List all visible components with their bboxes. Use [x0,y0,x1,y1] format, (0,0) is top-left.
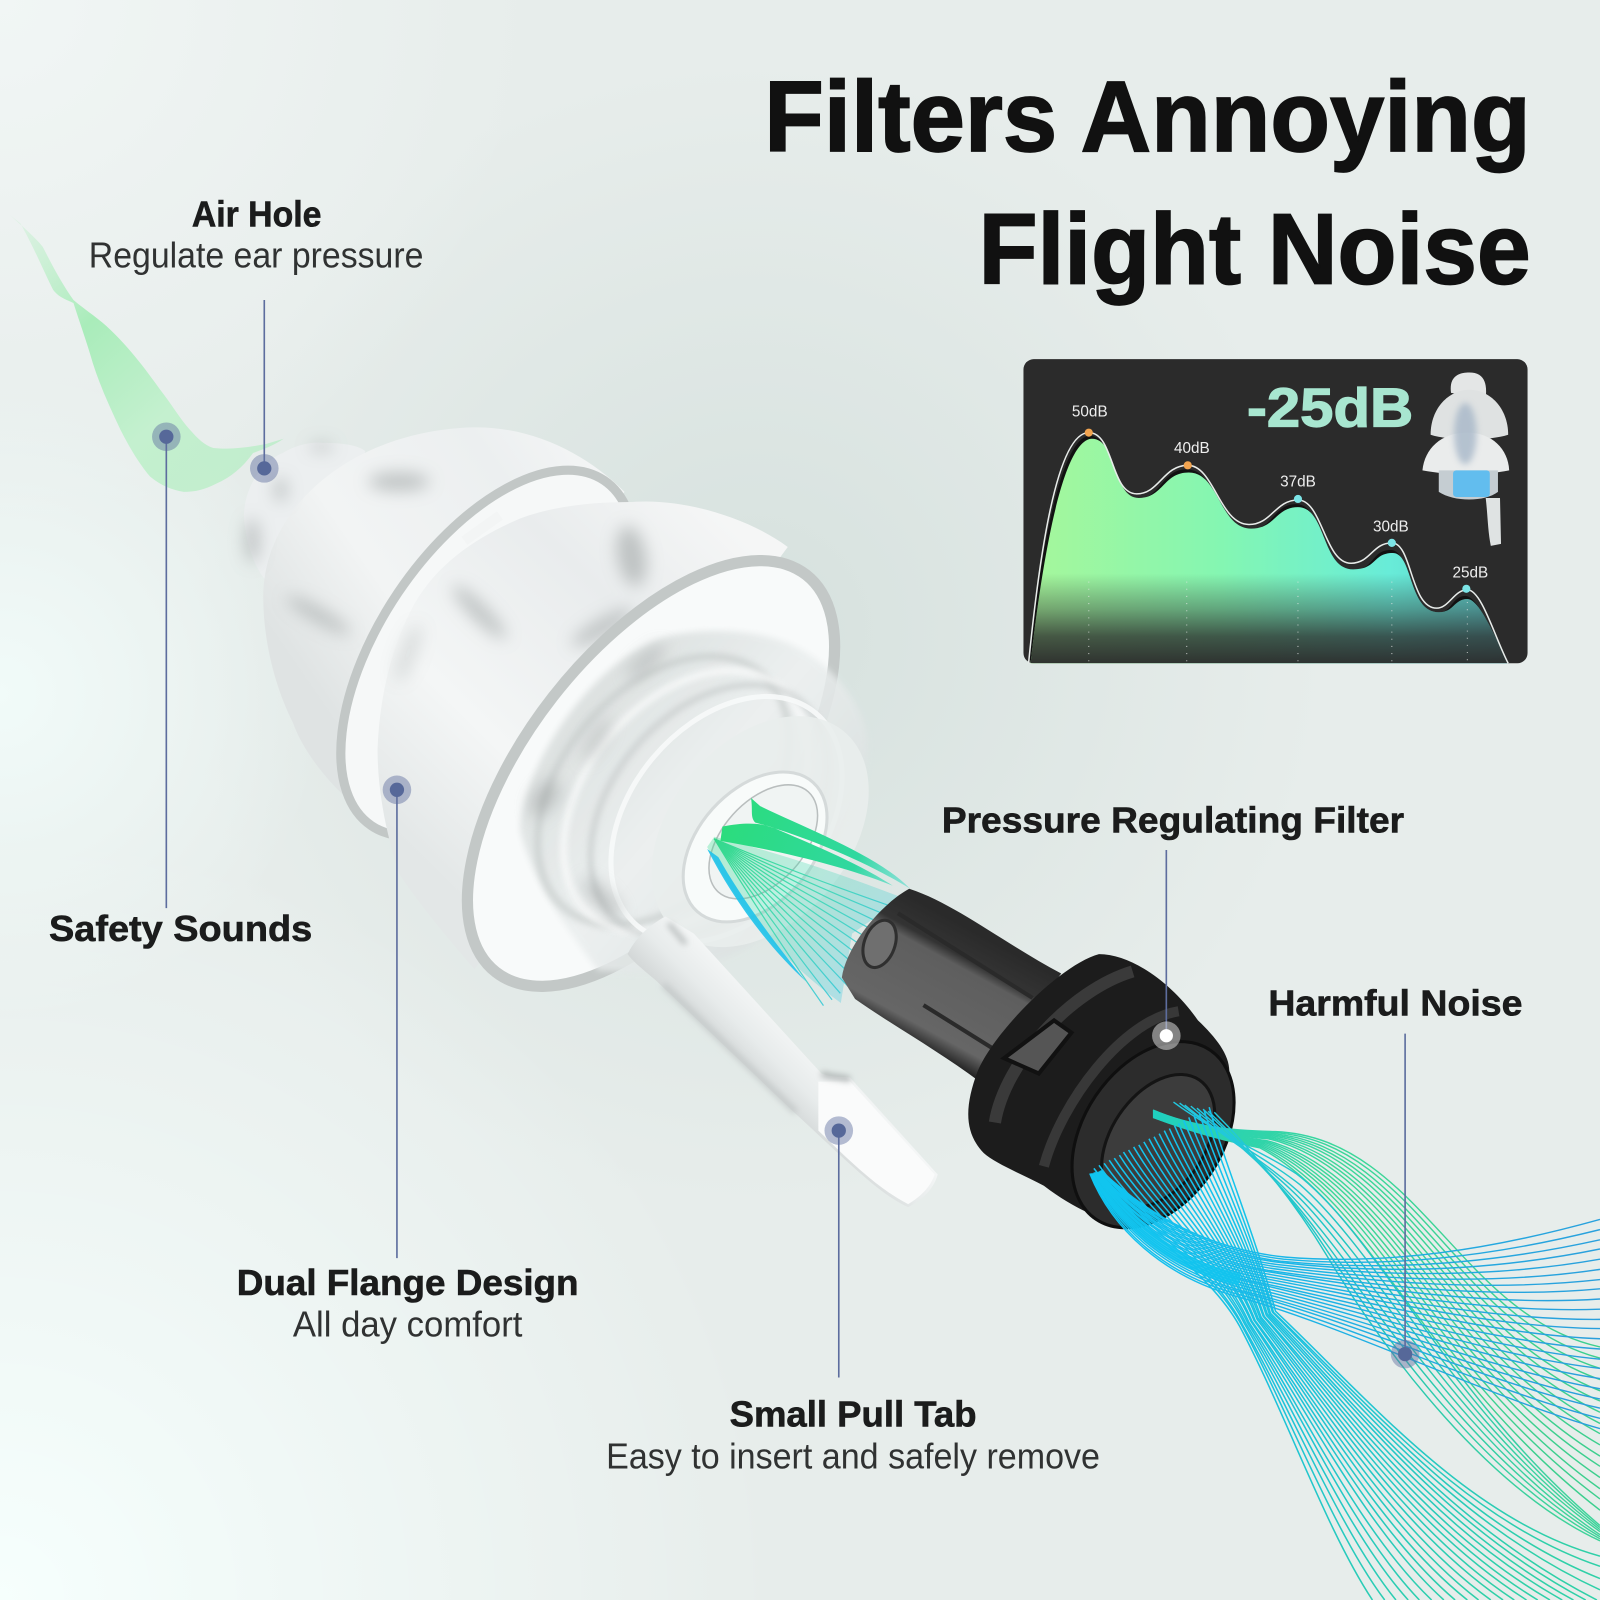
teal diagonal wave family [1173,1102,1600,1541]
label: small pull tab: Easy to insert and safely remove [606,1436,1100,1476]
pressure regulating filter, black [842,889,1268,1258]
callout: air hole marker [250,300,279,483]
lower cyan edge [707,849,806,982]
chart panel: -25dB [1023,359,1528,663]
callout: safety sounds marker [152,422,181,908]
filter front face [1038,1011,1268,1258]
inner hole shadow ring [688,764,839,919]
label: small pull tab: Small Pull Tab [730,1395,977,1435]
label: small pull tab [606,1395,1100,1476]
fan fill [707,837,903,1003]
earplug tip knob [244,443,365,588]
title [764,61,1531,306]
front flange ring [398,498,904,1049]
filter stem notch [857,916,902,972]
filter collar highlight band [995,971,1133,1122]
panel background [1023,359,1528,663]
pull tab edge highlight [663,923,850,1112]
label: harmful noise: Harmful Noise [1268,983,1522,1023]
inner sound wave [675,798,910,1006]
pull tab head [818,1082,935,1204]
cyan band core [1097,1172,1240,1280]
filter collar body [968,954,1229,1221]
label: safety sounds: Safety Sounds [49,909,312,949]
white curve line [1029,433,1508,663]
neck thread rings [487,608,889,987]
back flange bell [263,427,624,829]
filter mid band [1044,1011,1179,1166]
peak labels: 37dB [1280,474,1316,491]
peak labels [1072,403,1488,582]
front flange shading [390,523,651,685]
-25dB value: -25dB [1247,377,1413,439]
label: dual flange design [237,1263,579,1345]
label: air hole: Regulate ear pressure [89,235,423,275]
chart bottom fade [1026,573,1515,663]
callout: harmful noise marker [1391,1034,1419,1368]
label: dual flange design: All day comfort [293,1305,523,1345]
peak markers [1085,429,1470,593]
top green band [720,798,910,889]
callout: pressure filter marker [1152,850,1181,1050]
teal wave family [1094,1107,1600,1600]
title: Flight Noise [979,194,1531,306]
peak labels: 30dB [1373,519,1409,536]
peak labels: 50dB [1072,403,1108,420]
harmful noise waves [1090,1102,1600,1600]
peak labels: 40dB [1174,440,1210,457]
callout: pull tab marker [824,1116,853,1378]
chart area [1031,439,1508,663]
pull tab [628,916,938,1207]
filter stem [842,889,1061,1082]
callout lines and markers [152,300,1419,1378]
air sound wave, green [10,215,284,492]
front flange bell [378,501,788,969]
callout: dual flange marker [383,776,411,1258]
label: dual flange design: Dual Flange Design [237,1263,579,1303]
filter collar slot [1004,1020,1071,1073]
label: air hole: Air Hole [192,195,321,235]
label: air hole [89,195,423,275]
neck end face [607,674,913,989]
title: Filters Annoying [764,61,1531,173]
curve shadow [1029,436,1506,660]
back flange shading [245,443,430,640]
threaded neck [520,631,867,972]
neck shading [525,641,669,922]
ring highlight break [464,515,500,541]
filter inner opening [1078,1054,1238,1228]
chart dotted guide lines [1089,582,1467,663]
label: pressure regulating filter: Pressure Regulating Filter [942,801,1404,841]
inner hole [655,744,856,950]
peak labels: 25dB [1453,565,1488,582]
earplug [244,420,938,1207]
green wave family [1153,1110,1600,1510]
back flange ring [282,420,694,886]
blue wave family [1090,1171,1600,1429]
fan lines [675,839,903,1006]
filter stem dark channel [898,913,1033,1056]
mini earplug icon [1422,372,1509,546]
